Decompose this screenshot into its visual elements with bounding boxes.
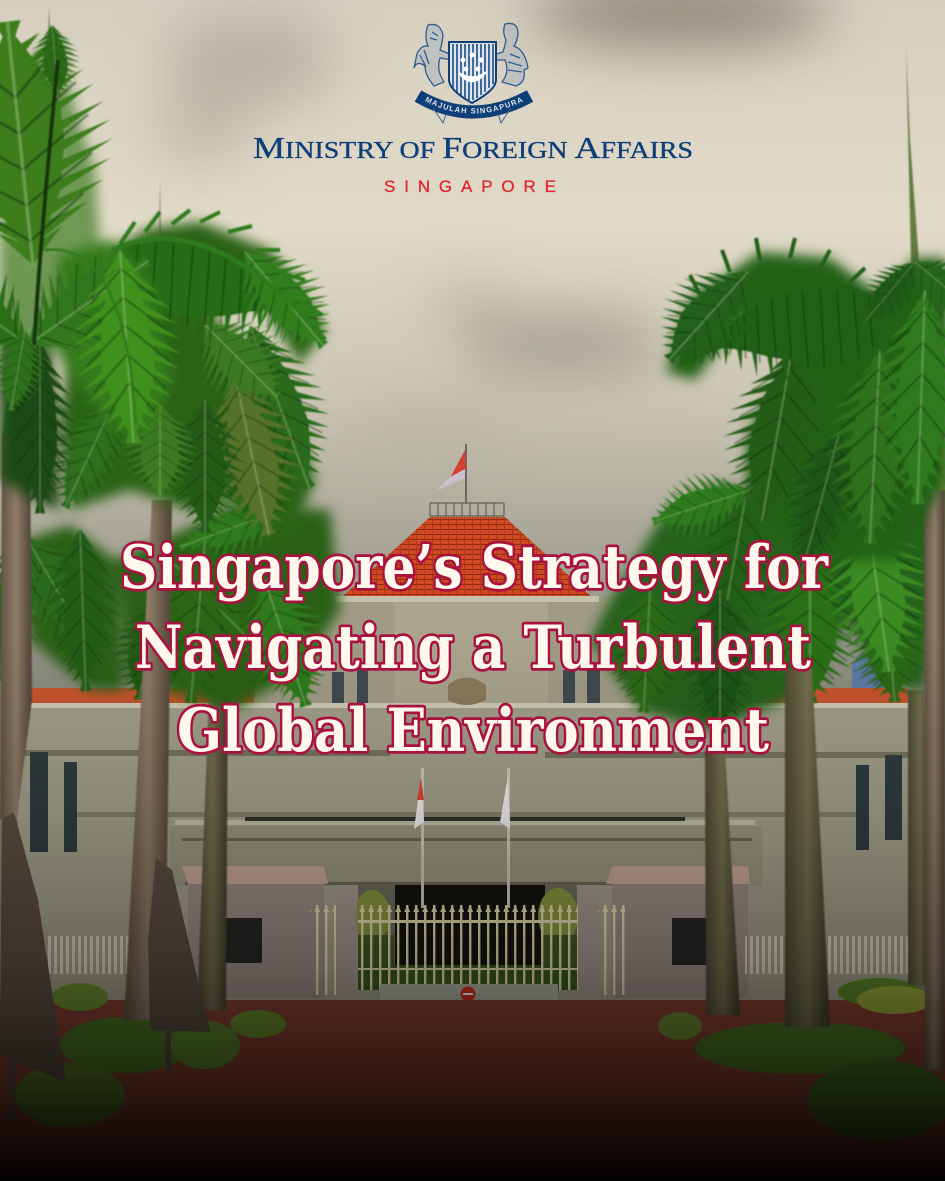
distant tower <box>852 628 898 690</box>
rachis <box>34 60 58 345</box>
palm right big <box>634 45 945 1070</box>
palm left mid crown <box>33 180 356 545</box>
title: Global Environment <box>177 696 769 766</box>
title: Navigating a Turbulent <box>135 613 811 683</box>
foliage mass: low palms <box>25 300 945 730</box>
side gates <box>310 905 625 995</box>
ministry name: MINISTRY OF FOREIGN AFFAIRS <box>253 130 693 165</box>
rooftop flag <box>436 444 467 504</box>
upper arching frond <box>634 238 896 414</box>
upright frond <box>0 12 125 275</box>
lower fronds <box>710 341 844 530</box>
entrance dark void <box>395 885 545 990</box>
flag poles <box>414 768 510 908</box>
coat of arms <box>413 22 534 124</box>
forecourt <box>0 1000 945 1181</box>
central upper block <box>254 596 642 756</box>
shield <box>449 42 496 103</box>
far palms <box>0 300 945 1027</box>
hedges <box>354 888 578 944</box>
tiled red roof <box>342 517 592 597</box>
central tower <box>394 596 548 776</box>
lion supporter <box>414 24 455 86</box>
barrier and no-entry sign <box>380 984 558 1002</box>
main facade <box>18 703 910 1003</box>
crown: left low palm <box>0 516 129 692</box>
bushes <box>15 978 945 1140</box>
fences <box>45 936 910 974</box>
foliage mass <box>666 252 945 560</box>
motto ribbon: MAJULAH SINGAPURA <box>425 96 523 114</box>
trunk: right mid <box>785 670 830 1027</box>
title <box>120 533 829 766</box>
trunks: back row <box>197 670 932 1015</box>
trunk <box>0 435 32 820</box>
facade windows <box>30 752 902 852</box>
crown fronds <box>867 288 945 506</box>
main gate <box>358 905 578 990</box>
tower windows <box>332 668 600 746</box>
umbrellas <box>0 808 210 1120</box>
dark frond below crown <box>4 340 76 513</box>
building: parliament house <box>18 444 910 1003</box>
title: Singapore’s Strategy for <box>120 533 829 603</box>
foliage mass <box>0 35 172 510</box>
palm left big <box>0 8 188 820</box>
trunk: left mid <box>124 500 172 1020</box>
foliage mass <box>60 222 325 540</box>
spear <box>906 45 919 262</box>
red side roofs <box>25 688 908 704</box>
bright drooping frond <box>66 246 188 447</box>
dark vignette overlay <box>0 640 945 1181</box>
tiger supporter <box>490 23 528 86</box>
crown: right low palm <box>602 458 943 733</box>
crown: centre-left palm <box>100 475 350 720</box>
roof railing <box>430 503 504 516</box>
long arching frond <box>93 210 356 378</box>
guard houses <box>188 880 748 998</box>
singapore wordmark: SINGAPORE <box>384 177 556 196</box>
national crest <box>448 678 486 705</box>
logo: Ministry of Foreign Affairs <box>253 22 693 196</box>
spear <box>48 8 51 58</box>
gate pillars <box>337 885 597 995</box>
crown fronds <box>0 219 177 386</box>
trunk <box>924 480 945 1070</box>
